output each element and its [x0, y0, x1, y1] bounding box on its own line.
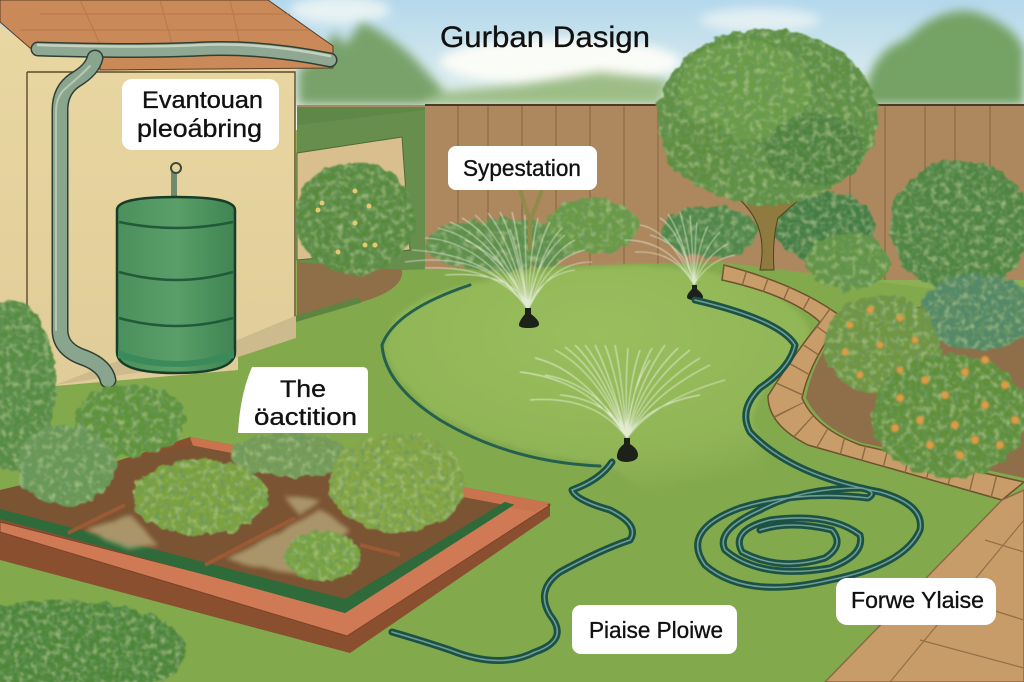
- yellow flowers: [316, 188, 378, 254]
- label: raised bed: [238, 367, 368, 433]
- label: raised bed: öactition: [254, 404, 357, 431]
- back shrubs behind lawn: [425, 192, 875, 271]
- paved path: [825, 490, 1024, 682]
- label: rain barrel: [122, 79, 279, 150]
- lawn base: [0, 262, 1024, 682]
- label: sprinkler: [448, 146, 597, 190]
- big tree: [657, 29, 877, 270]
- label: hose coil: [836, 578, 996, 625]
- sprinkler spray: front: [520, 345, 725, 438]
- label: rain barrel: pleoábring: [137, 115, 262, 143]
- label: raised bed: The: [280, 376, 326, 403]
- house wall: [0, 25, 296, 386]
- background trees: [298, 11, 1024, 105]
- label: hose coil: Forwe Ylaise: [851, 587, 984, 613]
- fence: [297, 105, 1024, 280]
- left shrubs and bed plants: [0, 300, 465, 682]
- brick edging: [722, 265, 1024, 500]
- irrigation stakes: [68, 505, 400, 565]
- inner lawn: [385, 266, 810, 490]
- sky: [0, 0, 1024, 130]
- mulch patches: [85, 495, 350, 575]
- title: Gurban Dasign: [440, 21, 650, 54]
- label: sprinkler: Sypestation: [463, 155, 581, 181]
- rain barrel: [117, 163, 235, 373]
- gutter and downspout: [38, 44, 330, 380]
- sprinkler spray: rear left: [405, 212, 592, 310]
- garden hose: [382, 285, 920, 661]
- sprinkler heads: [519, 285, 703, 462]
- raised garden bed: [0, 437, 550, 653]
- mulch bed right: [806, 290, 1024, 478]
- label: rain barrel: Evantouan: [142, 87, 263, 114]
- roof: [0, 0, 333, 70]
- sprinkler spray: rear right: [625, 212, 735, 285]
- label: hose left: Piaise Ploiwe: [589, 617, 723, 643]
- label: hose left: [572, 605, 737, 654]
- small sapling behind spray: [520, 190, 542, 250]
- mulch and shrub beside house: [238, 162, 415, 336]
- right shrubs: [806, 160, 1024, 478]
- orange flowers: [842, 306, 1019, 459]
